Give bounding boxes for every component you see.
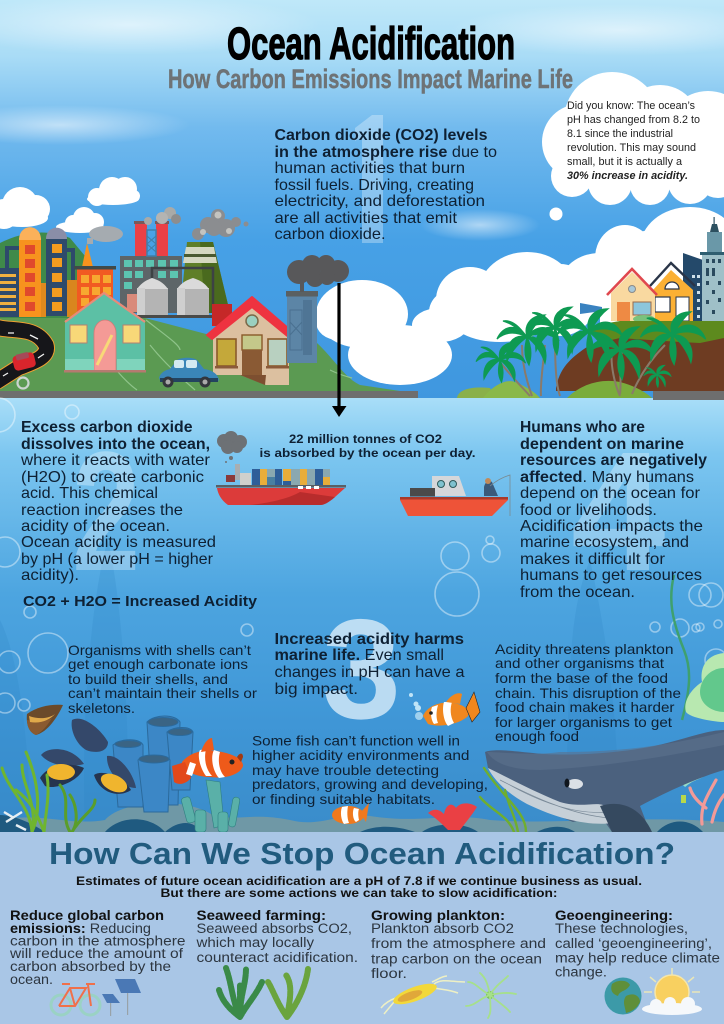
fish effects text: higher acidity environments and: [252, 748, 470, 763]
back hill: [0, 233, 90, 318]
arrow: [332, 283, 346, 417]
industrial towers: [0, 221, 230, 318]
food chain text: form the base of the food: [495, 671, 668, 686]
shell organisms text: get enough carbonate ions: [68, 657, 248, 672]
icon: green plankton: [466, 973, 516, 1018]
food chain text: enough food: [495, 729, 579, 744]
step 2 text: dissolves into the ocean,: [21, 436, 210, 453]
food chain text: chain. This disruption of the: [495, 686, 681, 701]
panel intro: But there are some actions we can take to slow acidification:: [160, 886, 558, 900]
red coral: [428, 803, 477, 830]
step 1 text: human activities that burn: [274, 160, 465, 177]
action: seaweed farming: which may locally: [195, 935, 315, 951]
thought bubble text: 30% increase in acidity.: [567, 170, 688, 182]
teal house: [64, 293, 146, 372]
bottom panel: [0, 832, 724, 1024]
thought bubble text: small, but it is actually a: [567, 156, 682, 168]
subtitle: How Carbon Emissions Impact Marine Life: [168, 64, 573, 94]
step 3 text: Increased acidity harms: [274, 631, 464, 648]
action: reduce emissions: ocean.: [10, 972, 53, 988]
step 4 text: Acidification impacts the: [520, 518, 703, 535]
ghost number 1: [355, 115, 383, 243]
ocean background: [0, 398, 724, 832]
step 2 text: Excess carbon dioxide: [21, 419, 193, 436]
fish effects text: [252, 734, 488, 807]
action: growing plankton: trap carbon on the ocean: [371, 952, 542, 968]
step 2 text: Ocean acidity is measured: [21, 534, 216, 551]
orange roof house: [607, 269, 657, 323]
food chain text: for larger organisms to get: [495, 715, 672, 730]
main hill: [0, 318, 400, 391]
action: geoengineering: [555, 907, 720, 980]
road strip right: [653, 391, 724, 400]
step 4 text: marine ecosystem, and: [520, 534, 689, 551]
action: growing plankton: Plankton absorb CO2: [371, 921, 514, 937]
step 4 text: dependent on marine: [520, 436, 684, 453]
step 4 text: makes it difficult for: [520, 551, 666, 568]
cliff: [590, 321, 724, 345]
action: seaweed farming: Seaweed farming:: [196, 907, 326, 923]
action: reduce emissions: emissions: Reducing: [10, 921, 151, 937]
action: growing plankton: [371, 907, 546, 982]
step 1 text: carbon dioxide.: [274, 226, 386, 243]
step 4 text: food or livelihoods.: [520, 502, 657, 519]
action: geoengineering: These technologies,: [555, 921, 688, 937]
icon: earth: [604, 978, 642, 1014]
step 2 text: acid. This chemical: [21, 485, 158, 502]
action: reduce emissions: will reduce the amount of: [9, 946, 183, 962]
clouds: left sky: [0, 177, 140, 233]
step 4 text: resources are negatively: [520, 452, 707, 469]
action: reduce emissions: Reduce global carbon: [10, 907, 164, 923]
yellow house: [650, 263, 695, 321]
food chain text: Acidity threatens plankton: [495, 642, 674, 657]
blue car: [159, 358, 219, 388]
step 3 text: changes in pH can have a: [274, 664, 465, 681]
blue sponge coral: [113, 716, 193, 812]
ghost number 4: 4: [571, 417, 666, 607]
shell organisms text: can’t maintain their shells or: [68, 686, 257, 701]
step 4 text: depend on the ocean for: [520, 485, 701, 502]
bubbles: [0, 398, 724, 720]
step 4 text: [520, 419, 707, 601]
clouds: big centre-right: [316, 207, 724, 385]
mussels: [27, 705, 136, 796]
action: geoengineering: called ‘geoengineering’,: [555, 936, 712, 952]
cargo ship: [216, 431, 346, 505]
thought bubble text: [567, 100, 700, 182]
step 1 text: are all activities that emit: [274, 210, 458, 227]
equation: CO2 + H2O = Increased Acidity: [23, 593, 258, 610]
thought bubble text: 8.1 since the industrial: [567, 128, 673, 140]
step 4 text: affected. Many humans: [520, 469, 694, 486]
seabed: [0, 803, 724, 832]
thought bubble text: Did you know: The ocean’s: [567, 100, 696, 112]
panel intro: [76, 874, 642, 900]
action: reduce emissions: carbon in the atmosphere: [10, 934, 186, 950]
step 2 text: acidity).: [21, 567, 79, 584]
step 2 text: (H2O) to create carbonic: [21, 469, 204, 486]
step 1 text: fossil fuels. Driving, creating: [274, 177, 474, 194]
step 3 text: marine life. Even small: [274, 647, 444, 664]
clownfish large: [172, 738, 243, 784]
ghost number 2: 2: [72, 417, 140, 607]
food chain text: and other organisms that: [495, 656, 664, 671]
food chain text: food chain makes it harder: [495, 700, 675, 715]
shell organisms text: [68, 643, 257, 716]
thought bubble text: pH has changed from 8.2 to: [567, 114, 700, 126]
step 3 text: big impact.: [274, 681, 358, 698]
shell organisms text: skeletons.: [68, 701, 135, 716]
low islets: [457, 381, 540, 398]
panel heading: How Can We Stop Ocean Acidification?: [49, 836, 675, 871]
action: growing plankton: Growing plankton:: [371, 907, 505, 923]
step 2 text: by pH (a lower pH = higher: [21, 551, 214, 568]
fishing boat: [400, 475, 510, 516]
sky background: [0, 0, 724, 400]
step 1 text: in the atmosphere rise due to: [274, 144, 497, 161]
action: seaweed farming: counteract acidification.: [196, 950, 358, 966]
absorption fact: 22 million tonnes of CO2: [289, 432, 442, 446]
action: reduce emissions: carbon absorbed by the: [10, 959, 171, 975]
step 2 text: acidity of the ocean.: [21, 518, 170, 535]
action: geoengineering: change.: [555, 964, 607, 980]
right island scene: [457, 217, 724, 400]
blue flag: [580, 303, 602, 314]
action: growing plankton: floor.: [371, 966, 407, 982]
action: geoengineering: may help reduce climate: [555, 950, 720, 966]
thought bubble text: revolution. This may sound: [567, 142, 696, 154]
icon: seaweed: [219, 968, 308, 1017]
road and red car: [0, 327, 47, 388]
panel intro: Estimates of future ocean acidification are a pH of 7.8 if we continue business as usual.: [76, 874, 642, 888]
step 1 text: Carbon dioxide (CO2) levels: [274, 127, 488, 144]
step 1 text: [274, 127, 497, 243]
seaweed and jellyfish, right: [671, 575, 724, 722]
icon: sun and cloud: [642, 968, 702, 1015]
left land and factory scene: [0, 207, 418, 398]
thought bubble: [542, 72, 724, 220]
brown roof house: [207, 297, 296, 385]
seaweed centre right: [480, 768, 526, 832]
action: seaweed farming: Seaweed absorbs CO2,: [196, 921, 352, 937]
action: growing plankton: from the atmosphere and: [371, 936, 546, 952]
icon: bicycle: [51, 984, 100, 1015]
icon: solar panels: [102, 979, 141, 1016]
fish effects text: or finding suitable habitats.: [252, 792, 435, 807]
action: seaweed farming: [195, 907, 358, 966]
title: Ocean Acidification: [227, 18, 515, 69]
step 4 text: humans to get resources: [520, 567, 702, 584]
action: geoengineering: Geoengineering:: [555, 907, 673, 923]
step 4 text: Humans who are: [520, 419, 645, 436]
fish effects text: predators, growing and developing,: [252, 777, 488, 792]
coral green: [181, 780, 240, 832]
skyscrapers: [683, 217, 724, 323]
pink coral right: [681, 772, 724, 824]
smokestack: [286, 255, 349, 363]
icon: yellow plankton: [381, 976, 465, 1014]
seaweed left: [2, 752, 95, 832]
factory smoke: [144, 207, 248, 240]
road strip: [0, 391, 418, 398]
shell organisms text: to build their shells, and: [68, 672, 228, 687]
step 4 text: from the ocean.: [520, 584, 635, 601]
palm trunks: [500, 335, 665, 396]
clownfish small: [332, 803, 369, 824]
step 2 text: reaction increases the: [21, 502, 183, 519]
step 2 text: where it reacts with water: [20, 452, 211, 469]
palm crowns: [476, 307, 706, 388]
absorption fact: [260, 432, 476, 460]
ghost number 3: 3: [322, 590, 401, 749]
shell organisms text: Organisms with shells can’t: [68, 643, 251, 658]
fish effects text: Some fish can’t function well in: [252, 734, 460, 748]
step 1 text: electricity, and deforestation: [274, 193, 485, 210]
clownfish middle: [423, 692, 480, 726]
fish effects text: may have trouble detecting: [252, 763, 439, 778]
step 2 text: [20, 419, 216, 584]
whale: [485, 730, 724, 832]
food chain text: [495, 642, 681, 744]
absorption fact: is absorbed by the ocean per day.: [260, 446, 476, 460]
step 3 text: [274, 631, 465, 698]
action: reduce emissions: [9, 907, 186, 988]
